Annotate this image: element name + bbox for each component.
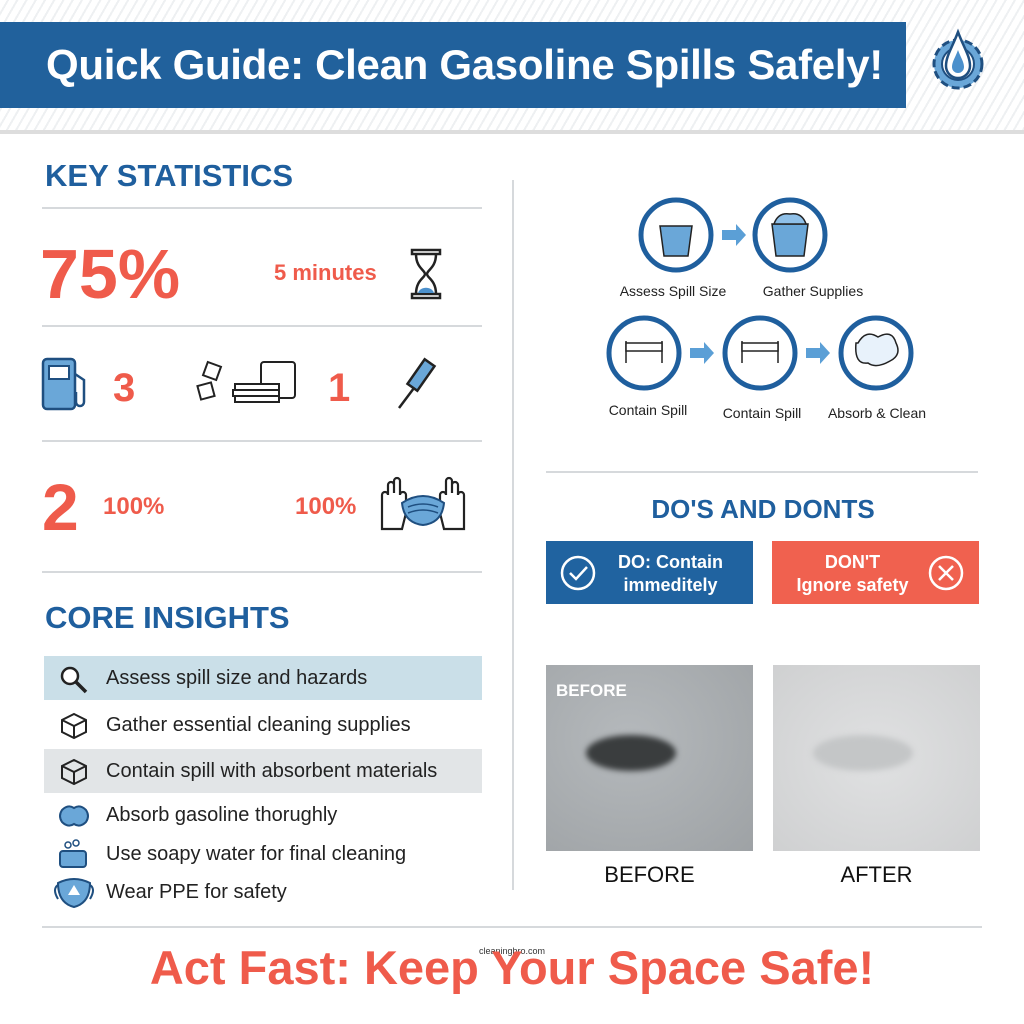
icon: gear drop (932, 28, 984, 90)
item 6: Wear PPE for safety (106, 881, 287, 903)
text: BEFORE (604, 862, 695, 887)
title banner: Quick Guide: Clean Gasoline Spills Safely! (46, 41, 883, 88)
item 4: Absorb gasoline thorughly (106, 804, 337, 826)
step labels: Assess Spill Size (620, 283, 726, 299)
do box (546, 541, 753, 604)
heading: key statistics: KEY STATISTICS (45, 158, 293, 193)
header stripes (0, 0, 1024, 132)
divider (512, 180, 514, 890)
stat row 1: 5 minutes (274, 260, 377, 285)
text: Absorb & Clean (828, 405, 926, 421)
text: Gather Supplies (763, 283, 863, 299)
icon: scraper brush (398, 358, 436, 409)
icon: cubes and towels (196, 360, 296, 403)
before photo (546, 665, 753, 851)
stat row 3: 2 (42, 470, 79, 544)
item 3 (44, 749, 482, 793)
item 6 (54, 878, 287, 908)
text: AFTER (840, 862, 913, 887)
after photo (773, 665, 980, 851)
icon: hourglass (410, 248, 442, 300)
stat row 1 (40, 235, 442, 313)
item 3: Contain spill with absorbent materials (106, 760, 437, 782)
insights list (44, 656, 482, 908)
item 1 (44, 656, 482, 700)
stat row 3: 100% (295, 493, 356, 520)
item 5: Use soapy water for final cleaning (106, 843, 406, 865)
text: Contain Spill (609, 402, 687, 418)
process flow (606, 198, 914, 390)
footer slogan: Act Fast: Keep Your Space Safe! (150, 941, 874, 994)
text: Contain Spill (723, 405, 801, 421)
title banner (0, 22, 906, 108)
stat row 2 (42, 358, 436, 410)
item 2: Gather essential cleaning supplies (106, 714, 411, 736)
dont box: DON'T (825, 552, 880, 572)
before photo: BEFORE (556, 681, 627, 700)
heading: core insights: CORE INSIGHTS (45, 600, 290, 635)
stat row 1: 75% (40, 235, 180, 313)
do box: DO: Contain (618, 552, 723, 572)
item 1: Assess spill size and hazards (106, 667, 367, 689)
do box: immeditely (623, 575, 718, 595)
icon: gloves and mask (380, 476, 466, 530)
text: cleaningbro.com (479, 946, 545, 956)
stat row 3 (42, 470, 466, 544)
stat row 2: 1 (328, 366, 350, 410)
heading: dos and donts: DO'S AND DONTS (651, 494, 875, 524)
icon: fuel pump (42, 358, 86, 410)
item 5 (59, 839, 406, 868)
dont box (772, 541, 979, 604)
stat row 3: 100% (103, 493, 164, 520)
dont box: Ignore safety (796, 575, 909, 595)
stat row 2: 3 (113, 366, 135, 410)
